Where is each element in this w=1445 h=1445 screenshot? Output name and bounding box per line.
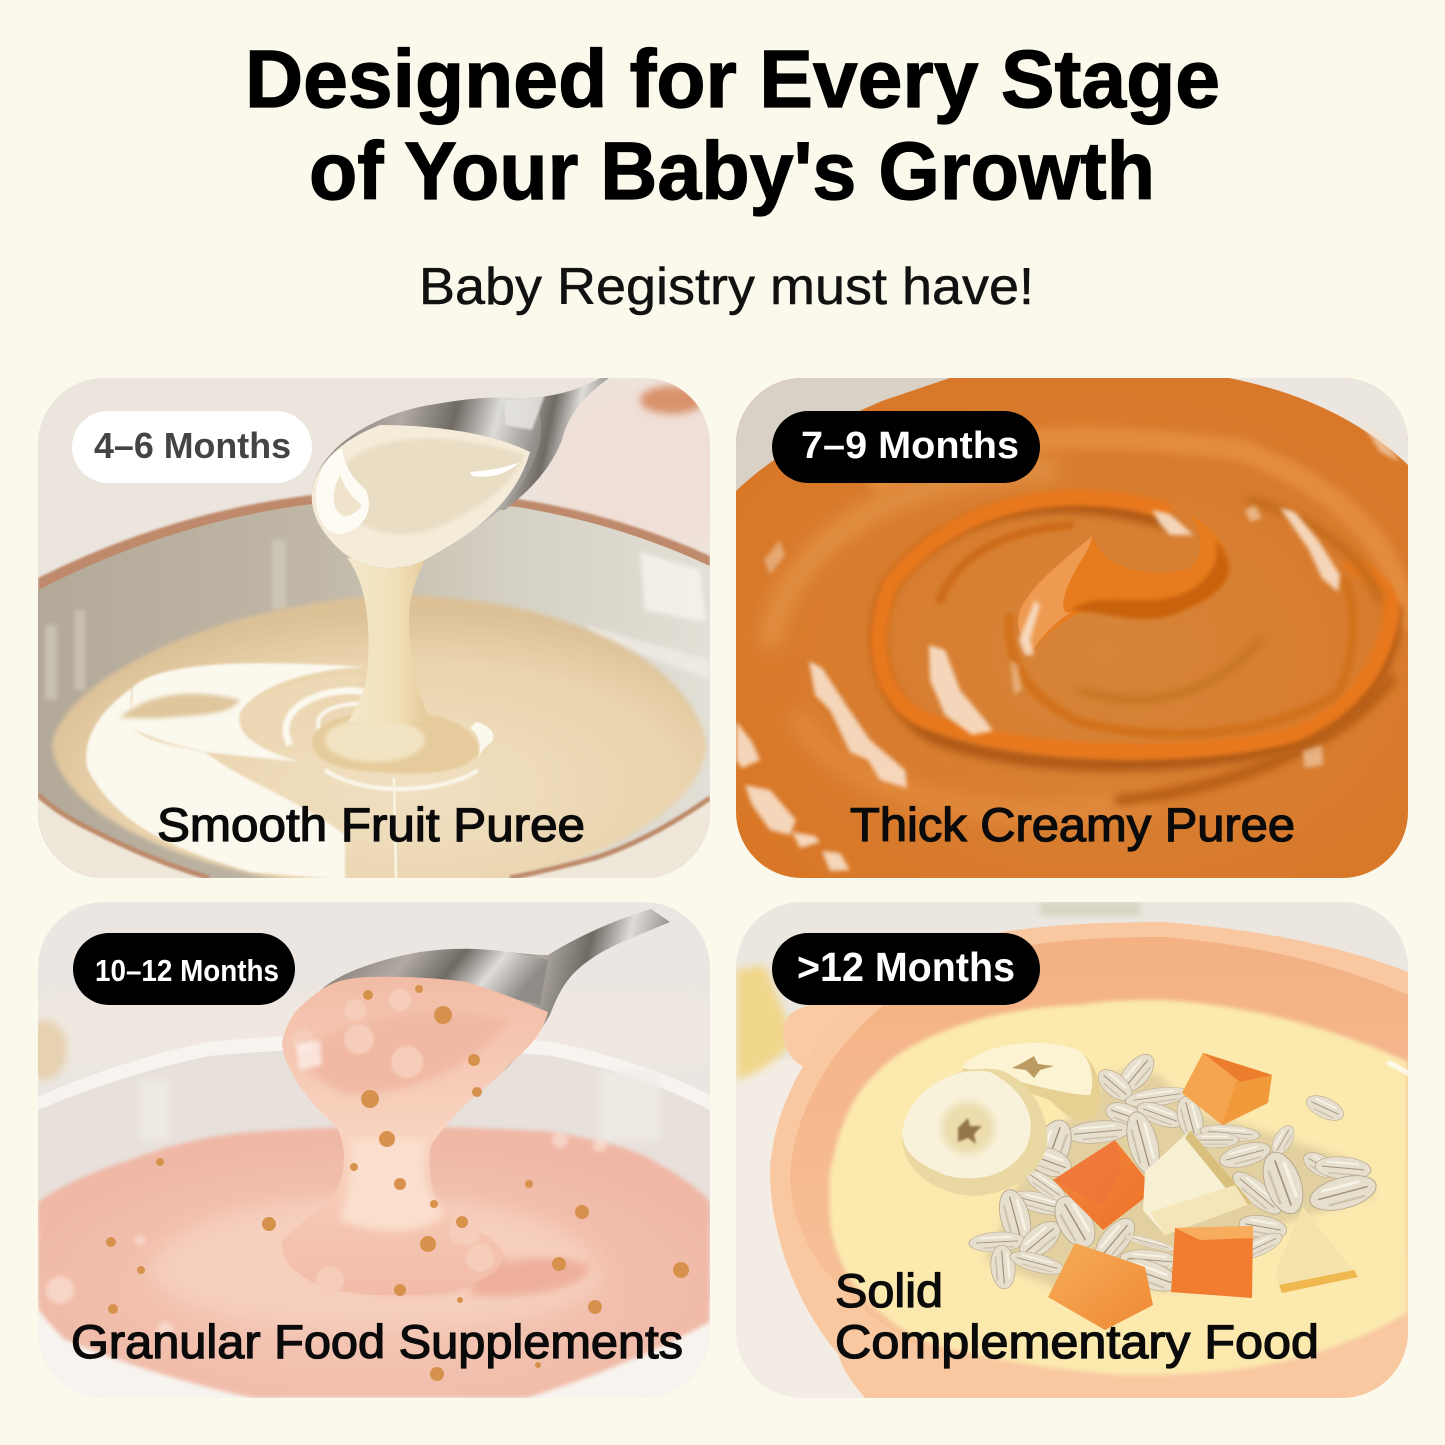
spoon (321, 909, 670, 1070)
panel: over 12 months solid complementary food (736, 902, 1408, 1398)
bowl (38, 1034, 710, 1398)
banana in background (736, 965, 795, 1080)
bowl handle (783, 1005, 852, 1067)
bowl body (770, 922, 1408, 1398)
panel: 4-6 months smooth fruit puree (38, 378, 760, 890)
badge: 7-9 months: 7–9 Months (801, 425, 1019, 467)
oat pile shadow (985, 1070, 1375, 1290)
badge: 4-6 months (72, 411, 312, 483)
badge: 4-6 months: 4–6 Months (94, 425, 291, 466)
badge: over 12 months (772, 933, 1040, 1005)
apple wedge (1275, 1207, 1358, 1293)
spoon (312, 378, 609, 568)
badge: over 12 months: >12 Months (797, 944, 1015, 990)
strand and blob (282, 977, 548, 1295)
title: of Your Baby's Growth (309, 126, 1155, 217)
glossy highlights (736, 420, 1400, 871)
bowl (38, 492, 710, 878)
orange cube top right (1182, 1053, 1272, 1125)
oats (969, 1048, 1380, 1298)
label: solid complementary food: Complementary Food (835, 1315, 1319, 1368)
bowl front lip (38, 795, 209, 878)
lumps and highlights (292, 989, 494, 1294)
banana chunk (1143, 1130, 1252, 1235)
title: Designed for Every Stage (245, 34, 1220, 125)
banana slice back (962, 1054, 1100, 1120)
base pool (312, 714, 479, 774)
ripples (286, 691, 478, 789)
badge: 10-12 months (73, 933, 295, 1005)
label: thick creamy puree: Thick Creamy Puree (850, 798, 1295, 851)
label: granular food supplements: Granular Food Supplements (71, 1315, 683, 1368)
panel: 10-12 months granular food supplements (23, 902, 710, 1398)
puree (38, 1127, 710, 1398)
label: solid complementary food (835, 1264, 1319, 1368)
badge: 7-9 months (772, 411, 1040, 483)
panel: 7-9 months thick creamy puree (736, 378, 1408, 878)
badge: 10-12 months: 10–12 Months (95, 953, 279, 988)
grain dots (106, 985, 689, 1381)
label: smooth fruit puree: Smooth Fruit Puree (157, 798, 585, 851)
banana slice front (902, 1069, 1047, 1196)
swirl centre (1018, 515, 1229, 651)
puree surface (52, 595, 706, 890)
soup (829, 1000, 1408, 1375)
title (245, 34, 1220, 217)
stream (347, 558, 432, 722)
subtitle: Baby Registry must have! (419, 258, 1034, 316)
orange cube centre (1053, 1140, 1155, 1230)
label: solid complementary food: Solid (835, 1264, 943, 1317)
orange cube bottom (1048, 1243, 1153, 1330)
orange cube bottom right (1171, 1226, 1253, 1298)
swirl ridges (770, 438, 1405, 811)
